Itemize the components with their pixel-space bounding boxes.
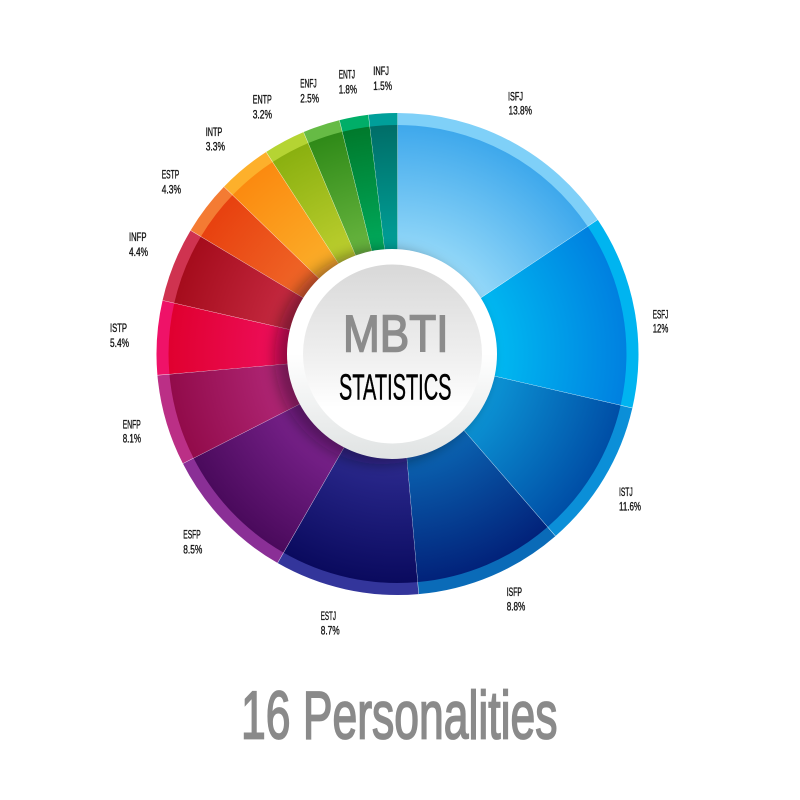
label: INTP: INTP — [206, 126, 222, 139]
segment: ENTJ — [340, 115, 398, 354]
label: ISFJ: 13.8% — [508, 104, 532, 117]
segment: INFJ — [369, 113, 398, 354]
title: 16 Personalities — [241, 678, 558, 754]
label: ENFJ: 2.5% — [300, 92, 319, 105]
donut chart: MBTI type shares — [156, 113, 638, 595]
label: ISTP — [110, 322, 129, 350]
segment: ESTJ — [277, 354, 418, 595]
label: ESFP: ESFP — [183, 528, 201, 541]
label: ESTJ: ESTJ — [321, 610, 336, 623]
label: ENFJ: ENFJ — [300, 77, 317, 90]
segment: INTP — [224, 152, 398, 354]
label: ISFJ: ISFJ — [508, 90, 523, 104]
label: ENFP: 8.1% — [123, 433, 141, 446]
label: ESFJ — [653, 308, 668, 336]
segment: ENFP — [157, 354, 398, 463]
label: ESFJ: 12% — [653, 323, 668, 336]
labels — [110, 65, 668, 638]
label: ISTP: ISTP — [110, 322, 127, 335]
label: ENTJ: ENTJ — [339, 68, 355, 81]
label: INFP: INFP — [129, 231, 147, 244]
label: ENTJ: 1.8% — [339, 83, 357, 96]
segment: ISFP — [398, 354, 555, 594]
label: ESTJ: 8.7% — [321, 625, 340, 638]
label: ISTJ — [619, 486, 641, 513]
segment: ISTP — [156, 300, 398, 375]
label: ENFJ — [300, 77, 319, 105]
segment: ESTP — [191, 187, 398, 354]
infographic canvas — [110, 66, 668, 740]
label: ESTP — [162, 169, 181, 196]
centre badge — [287, 249, 497, 459]
label: ISFP: ISFP — [507, 586, 522, 599]
label: ESTJ — [321, 610, 340, 638]
label: ENFP — [123, 419, 141, 446]
label: ISTJ: ISTJ — [619, 486, 633, 499]
segment: ENFJ — [304, 120, 398, 354]
label: INTP — [206, 126, 225, 154]
badge subheading: STATISTICS: STATISTICS — [339, 366, 452, 407]
segment: ISTJ — [398, 354, 632, 536]
badge outer ring — [287, 249, 497, 459]
segment: ESFP — [183, 354, 398, 563]
label: ENTP: ENTP — [253, 93, 272, 106]
label: ENTP: 3.2% — [253, 108, 272, 121]
label: ISFJ — [508, 90, 532, 117]
label: ESTP: ESTP — [162, 169, 179, 182]
segment: ESFJ — [398, 220, 638, 408]
label: INFJ: INFJ — [373, 65, 389, 78]
label: ISFP: 8.8% — [507, 601, 525, 614]
label: INFP: 4.4% — [129, 246, 148, 259]
label: ENTJ — [339, 68, 357, 96]
badge inner disc — [303, 264, 482, 444]
label: ESFP: 8.5% — [183, 543, 202, 556]
label: INFJ: 1.5% — [373, 80, 392, 93]
shadow of centre badge — [275, 250, 489, 464]
label: ESTP: 4.3% — [162, 183, 181, 196]
badge heading: MBTI: MBTI — [343, 306, 448, 364]
label: INFP — [129, 231, 148, 259]
label: ESFJ: ESFJ — [653, 308, 668, 321]
label: ENFP: ENFP — [123, 419, 141, 432]
label: INTP: 3.3% — [206, 141, 225, 154]
segment: INFP — [163, 230, 398, 354]
label: ISFP — [507, 586, 525, 614]
segment: ENTP — [266, 132, 398, 354]
label: INFJ — [373, 65, 392, 93]
segment: ISFJ — [398, 113, 598, 354]
label: ESFP — [183, 528, 202, 556]
label: ISTP: 5.4% — [110, 337, 129, 350]
label: ENTP — [253, 93, 272, 121]
label: ISTJ: 11.6% — [619, 500, 641, 513]
